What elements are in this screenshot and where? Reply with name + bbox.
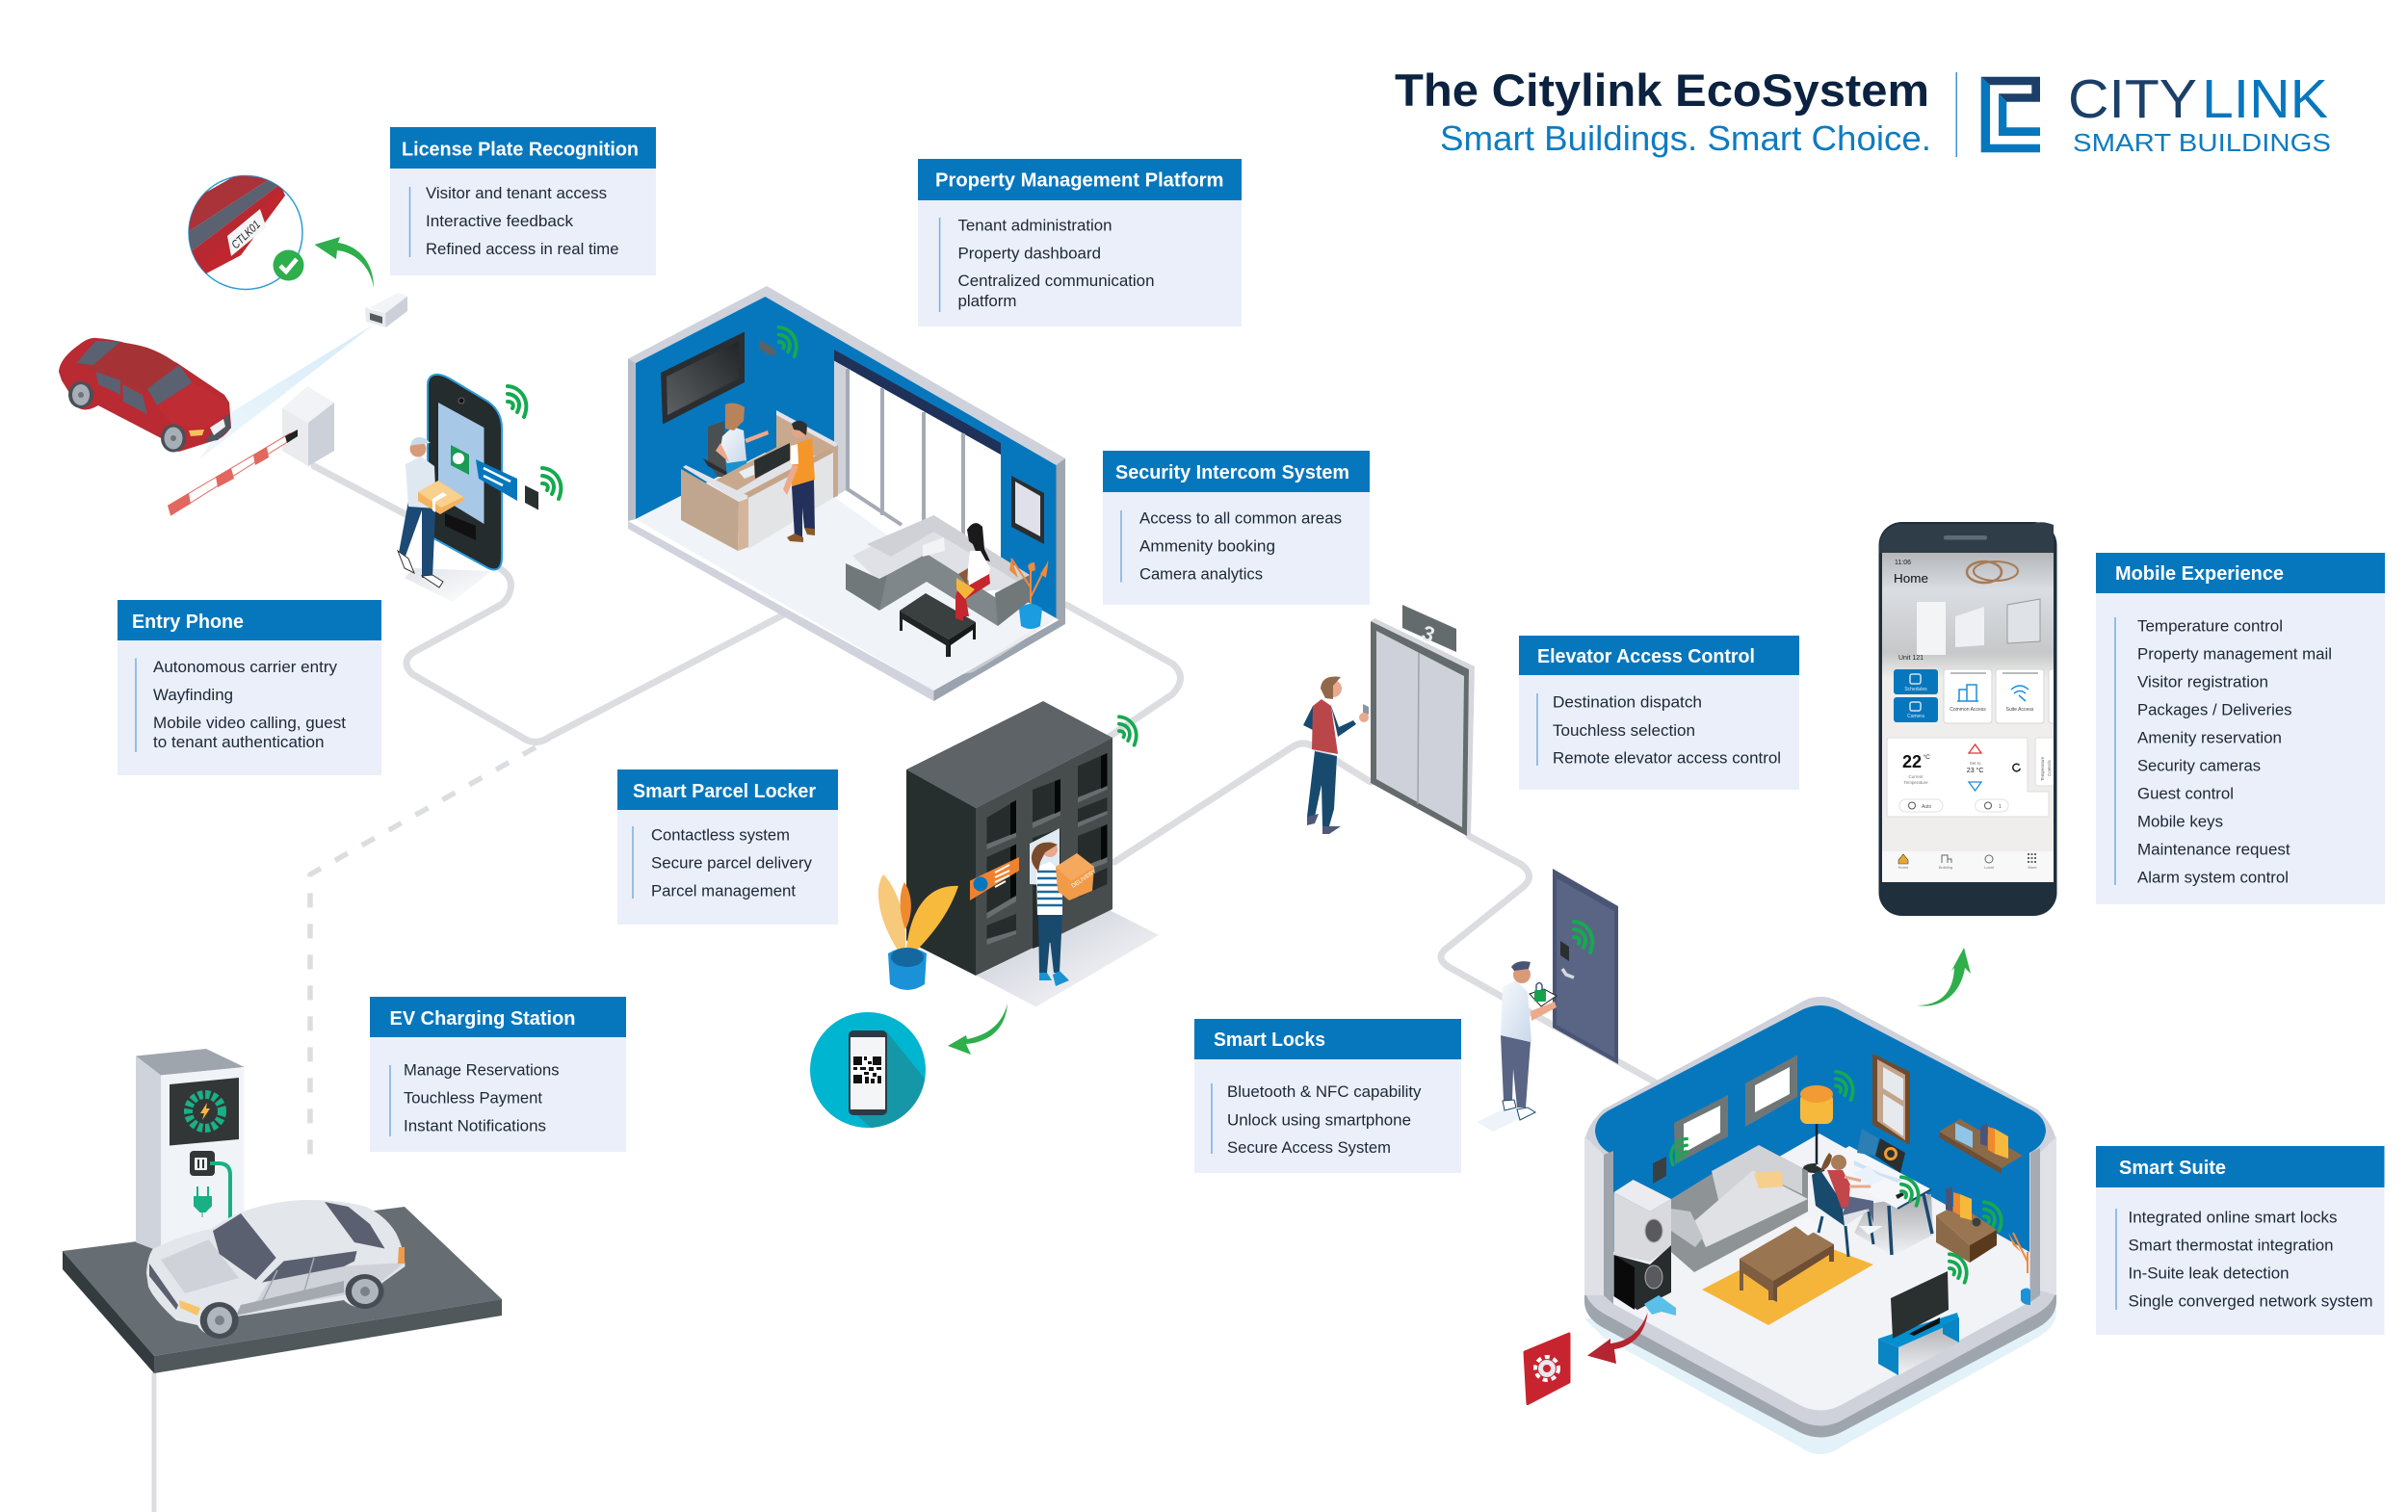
locker compartments xyxy=(986,753,1108,949)
title: The Citylink EcoSystem xyxy=(1395,65,1929,116)
parcel sign xyxy=(970,857,1019,900)
icon: red car xyxy=(59,338,231,453)
panel: Smart Suite: Integrated online smart locks xyxy=(2129,1210,2337,1227)
TV and stand xyxy=(1878,1271,1959,1375)
icon: signal xyxy=(1984,1202,2002,1231)
illustration: elevator xyxy=(1303,605,1475,836)
icon: camera xyxy=(365,293,407,327)
illustration: mobile phone: Common Access xyxy=(1950,707,1986,713)
illustration: mobile phone: 22 xyxy=(1902,752,1922,771)
panel: Entry Phone: Autonomous carrier entry xyxy=(153,659,338,676)
illustration: mobile phone: Current xyxy=(1908,774,1924,779)
floor shadow xyxy=(977,910,1159,1007)
illustration: mobile phone: Suite Access xyxy=(2006,707,2034,713)
glazed wall xyxy=(834,360,1001,616)
illustration: mobile phone: Unit 121 xyxy=(1898,655,1924,662)
icon: signal xyxy=(1901,1177,1919,1206)
title: Smart Buildings. Smart Choice. xyxy=(1440,118,1931,158)
panel: License Plate Recognition: Interactive feedback xyxy=(426,213,574,230)
panel: Elevator Access Control: Elevator Access Control xyxy=(1537,645,1755,667)
washer dryer xyxy=(1614,1180,1671,1310)
illustration: mobile phone: Schedules xyxy=(1904,687,1927,692)
door xyxy=(1553,869,1618,1064)
logo: Citylink Smart Buildings xyxy=(1955,68,2331,157)
man at elevator xyxy=(1303,676,1369,834)
icon: signal xyxy=(1836,1072,1853,1100)
panel: Security Intercom System: Camera analytics xyxy=(1139,566,1263,584)
work desk xyxy=(1816,1129,1932,1255)
panel: EV Charging Station xyxy=(370,997,626,1152)
window tall xyxy=(1872,1054,1910,1145)
illustration: mobile phone xyxy=(1878,522,2057,916)
panel: Mobile Experience: Packages / Deliveries xyxy=(2137,701,2292,718)
illustration: mobile phone: Auto xyxy=(1922,804,1932,810)
locker cabinet xyxy=(906,701,1112,808)
panel: Smart Locks xyxy=(1194,1019,1461,1173)
panel: Entry Phone: Mobile video calling, guest xyxy=(153,715,346,732)
visitor man xyxy=(783,421,815,542)
silver car xyxy=(146,1200,405,1339)
panel: Smart Parcel Locker: Parcel management xyxy=(651,882,796,899)
illustration: mobile phone: Temperature xyxy=(2040,756,2045,781)
icon: signal xyxy=(508,386,526,417)
panel: Mobile Experience: Alarm system control xyxy=(2137,869,2289,886)
panel: Elevator Access Control xyxy=(1519,636,1799,790)
illustration: mobile phone: Building xyxy=(1939,865,1952,870)
thermostat xyxy=(1653,1157,1666,1184)
suite wall cap xyxy=(1584,997,2056,1425)
icon: signal xyxy=(779,327,797,356)
panel: Entry Phone: Wayfinding xyxy=(153,687,233,704)
illustration: mobile phone: Set to xyxy=(1970,761,1981,766)
panel: Smart Parcel Locker: Contactless system xyxy=(651,826,790,844)
suite floor xyxy=(1613,1134,2029,1410)
coffee table xyxy=(900,593,976,657)
suite blue walls xyxy=(1595,1005,2046,1304)
panel: Property Management Platform xyxy=(918,159,1242,326)
panel: EV Charging Station: Touchless Payment xyxy=(404,1090,542,1108)
panel: License Plate Recognition: License Plate Recognition xyxy=(402,139,639,160)
parking slab xyxy=(63,1207,502,1356)
reception desk back panel xyxy=(776,412,838,496)
panel: Property Management Platform: platform xyxy=(957,293,1017,310)
rug xyxy=(1702,1238,1873,1325)
elevator doors xyxy=(1371,618,1475,836)
arrow: suite to mobile xyxy=(1917,948,1971,1006)
panel: Smart Parcel Locker: Smart Parcel Locker xyxy=(633,780,816,802)
arrow: locker to QR xyxy=(948,1004,1008,1055)
illustration: mobile phone: Temperature xyxy=(1903,780,1928,785)
panel: Smart Locks: Bluetooth & NFC capability xyxy=(1227,1083,1422,1101)
camera beam xyxy=(199,325,374,459)
illustration: EV charging xyxy=(63,1049,502,1373)
suite side walls xyxy=(1584,1136,1604,1295)
plant xyxy=(878,874,958,990)
QR phone badge xyxy=(810,1012,926,1128)
panel: Entry Phone: to tenant authentication xyxy=(153,734,324,751)
illustration: mobile phone: Camera xyxy=(1907,714,1924,719)
TV xyxy=(661,331,745,424)
nightstand xyxy=(1936,1186,1997,1263)
illustration: mobile phone: °C xyxy=(1923,753,1930,761)
panel: Elevator Access Control: Destination dispatch xyxy=(1553,693,1702,711)
panel: Property Management Platform: Centralized communication xyxy=(957,273,1154,290)
panel: Smart Locks: Unlock using smartphone xyxy=(1227,1111,1411,1129)
icon: barrier gate xyxy=(168,386,334,515)
icon: signal xyxy=(1671,1138,1687,1165)
illustration: mobile phone: More xyxy=(2028,865,2037,870)
panel: Security Intercom System: Security Intercom System xyxy=(1115,461,1349,483)
panel: License Plate Recognition: Visitor and tenant access xyxy=(426,185,607,202)
panel: EV Charging Station: Instant Notifications xyxy=(404,1117,546,1134)
illustration: license plate scene xyxy=(59,175,407,515)
panel: Security Intercom System xyxy=(1103,451,1370,605)
panel: Mobile Experience: Temperature control xyxy=(2137,618,2283,636)
courier xyxy=(398,437,463,587)
illustration: mobile phone: Home xyxy=(1894,571,1928,586)
panel: Smart Suite xyxy=(2096,1146,2385,1335)
panel: Security Intercom System: Access to all common areas xyxy=(1139,510,1342,528)
suite dark rim xyxy=(1584,997,2056,1437)
illustration: parcel locker xyxy=(810,701,1159,1128)
elevator sign xyxy=(1402,605,1456,652)
plant xyxy=(1009,557,1048,629)
sofa xyxy=(1671,1145,1808,1272)
man at door xyxy=(1501,961,1557,1120)
coffee table xyxy=(1740,1216,1834,1302)
panel: Mobile Experience: Amenity reservation xyxy=(2137,730,2282,747)
elevator sign: 3 xyxy=(1419,620,1438,647)
panel: Mobile Experience: Mobile keys xyxy=(2137,813,2223,830)
icon: signal xyxy=(1574,922,1592,952)
L-shaped sofa xyxy=(846,515,1030,626)
security camera xyxy=(759,340,777,355)
panel: Mobile Experience: Maintenance request xyxy=(2137,842,2290,859)
panel: Smart Parcel Locker: Secure parcel delivery xyxy=(651,855,813,873)
panel: Elevator Access Control: Remote elevator access control xyxy=(1553,749,1781,767)
window left xyxy=(1674,1095,1728,1164)
icon: signal xyxy=(1950,1254,1967,1283)
panel: License Plate Recognition: Refined access in real time xyxy=(426,241,618,258)
arrow: camera to plate xyxy=(314,237,374,288)
plant xyxy=(2008,1233,2030,1305)
panel: EV Charging Station: Manage Reservations xyxy=(404,1061,560,1079)
panel: Security Intercom System: Ammenity booking xyxy=(1139,537,1275,555)
floor lamp xyxy=(1800,1085,1833,1173)
panel: Property Management Platform: Tenant administration xyxy=(957,218,1112,235)
illustration: mobile phone: 11:06 xyxy=(1895,560,1911,566)
illustration: entry phone xyxy=(398,375,561,602)
window middle xyxy=(1745,1056,1797,1127)
panel: Entry Phone: Entry Phone xyxy=(132,611,244,633)
panel: Mobile Experience: Visitor registration xyxy=(2137,674,2268,691)
illustration: mobile phone: 23 °C xyxy=(1967,767,1983,774)
panel: Property Management Platform: Property Management Platform xyxy=(935,169,1223,191)
icon: signal xyxy=(542,468,561,499)
seated woman with chair xyxy=(1812,1153,1883,1257)
panel: Mobile Experience: Property management mail xyxy=(2137,645,2332,663)
desk floor shadow xyxy=(1854,1194,1933,1256)
panel: Smart Suite: Smart Suite xyxy=(2119,1157,2226,1179)
icon: plate magnifier: CTLK01 xyxy=(228,218,263,251)
panel: Smart Locks: Secure Access System xyxy=(1227,1139,1391,1157)
panel: Mobile Experience: Guest control xyxy=(2137,786,2234,803)
logo: Citylink Smart Buildings: CITY xyxy=(2068,68,2197,130)
floor shadow xyxy=(405,568,491,602)
panel: EV Charging Station: EV Charging Station xyxy=(389,1007,576,1030)
arrow: leak to alert xyxy=(1587,1313,1648,1364)
person shadow xyxy=(1477,1109,1536,1132)
woman with parcel xyxy=(1032,842,1098,986)
illustration: mobile phone: Controls xyxy=(2047,759,2052,776)
panel: Smart Suite: Single converged network system xyxy=(2129,1292,2373,1310)
panel: License Plate Recognition xyxy=(390,127,656,275)
receptionist xyxy=(703,404,769,477)
leak alert tile xyxy=(1525,1334,1569,1404)
illustration: smart lock door xyxy=(1477,869,1618,1132)
illustration: lobby room xyxy=(628,286,1065,701)
illustration: smart suite xyxy=(1525,997,2056,1454)
icon: entry phone device xyxy=(428,375,502,570)
logo: Citylink Smart Buildings: SMART BUILDINGS xyxy=(2073,128,2331,157)
panel: Smart Suite: Smart thermostat integration xyxy=(2129,1237,2333,1254)
picture frame xyxy=(1011,476,1044,544)
panel: Mobile Experience: Security cameras xyxy=(2137,757,2261,774)
panel: Smart Suite: In-Suite leak detection xyxy=(2129,1265,2289,1283)
icon: signal xyxy=(1119,717,1137,745)
seated woman xyxy=(955,523,990,621)
illustration: mobile phone: 1 xyxy=(1999,804,2002,810)
reception desk xyxy=(681,441,838,551)
lock reader xyxy=(1560,941,1569,961)
water leak xyxy=(1644,1295,1676,1316)
panel: Mobile Experience: Mobile Experience xyxy=(2115,562,2284,585)
logo: Citylink Smart Buildings: LINK xyxy=(2202,68,2328,130)
illustration: mobile phone: Home xyxy=(1898,865,1909,870)
lobby shell xyxy=(628,521,934,701)
illustration: mobile phone: Local xyxy=(1984,865,1994,870)
panel: Smart Locks: Smart Locks xyxy=(1214,1029,1325,1051)
panel: Property Management Platform: Property dashboard xyxy=(957,245,1101,262)
panel: Elevator Access Control: Touchless selection xyxy=(1553,722,1695,740)
panel: Smart Parcel Locker xyxy=(617,769,838,925)
charger xyxy=(136,1049,245,1252)
panel: Mobile Experience xyxy=(2096,553,2385,904)
suite base shadow xyxy=(1584,1310,2056,1454)
title xyxy=(1395,65,1931,158)
connector paths xyxy=(154,466,1654,1512)
wall shelf xyxy=(1939,1119,2023,1174)
icon: plate magnifier xyxy=(188,175,304,289)
panel: Entry Phone xyxy=(118,600,381,775)
woman with parcel: DELIVERY xyxy=(1071,869,1098,890)
